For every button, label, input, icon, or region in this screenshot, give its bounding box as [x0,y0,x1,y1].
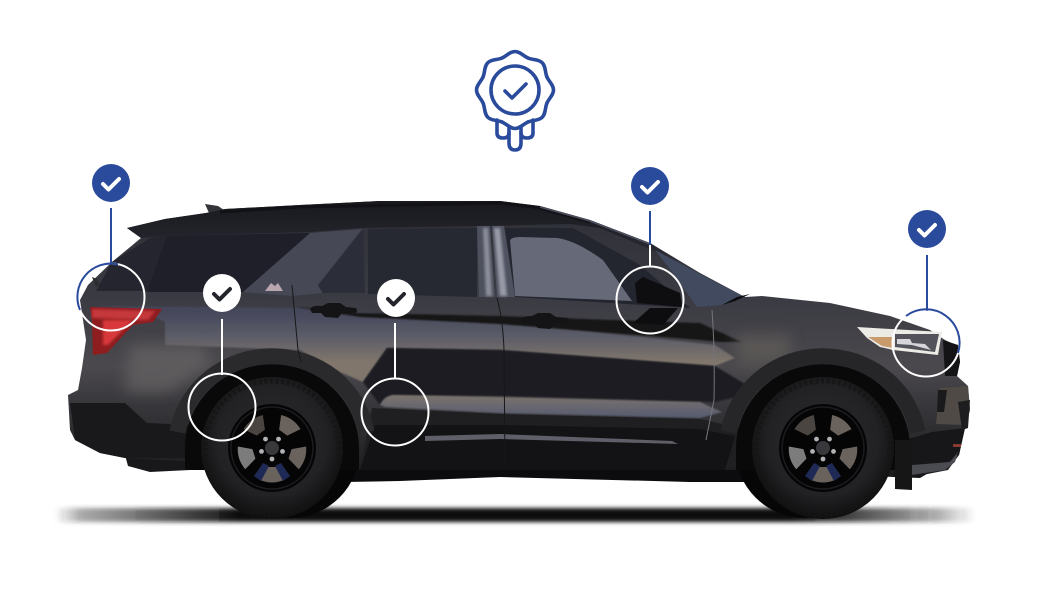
rear door window [368,228,477,297]
check badge [908,210,946,248]
body side reflections [96,306,790,418]
front door window [505,228,690,308]
marker: side mirror [616,167,684,334]
focus ring [78,264,144,330]
focus ring [362,378,428,446]
rear wheel [201,377,343,519]
marker: rear window and tail light [77,164,144,330]
check badge [377,279,415,317]
roof band [127,201,680,262]
marker: rear door panel [362,279,428,446]
rear quarter window [147,233,310,292]
rear wheel arch [178,356,366,470]
leader line [394,323,396,379]
ground shadow [55,508,975,522]
antenna [92,277,100,287]
front wheel [752,377,894,519]
tail light [90,307,162,355]
SUV illustration [68,201,970,519]
leader line [926,255,928,311]
check badge [203,274,241,312]
check badge [92,164,130,202]
leader line [110,208,112,264]
door handles [310,303,569,329]
windshield [655,250,745,307]
door seams [292,285,505,465]
rear roof fin [205,204,224,213]
focus ring [892,310,960,376]
badge icon: rosette with check [476,52,554,150]
focus ring [616,266,684,334]
side mirror [633,277,682,325]
front grille and fog light [936,340,970,447]
opposite side tyres [220,378,360,518]
body shell [68,201,970,477]
check badge [631,167,669,205]
C pillar panel [243,229,362,296]
tailgate glass [96,236,187,291]
C pillar triangle window [318,230,365,293]
mud flap [895,440,912,490]
marker: rear wheel arch [188,274,256,440]
roof badge [265,283,283,291]
B pillar strips [477,226,515,297]
headlight [857,327,942,355]
focus ring [188,374,256,440]
leader line [221,319,223,375]
front wheel arch [728,356,918,470]
underbody [125,455,190,472]
lower cladding [360,408,740,470]
leader line [649,211,651,246]
marker: headlight [892,210,960,376]
